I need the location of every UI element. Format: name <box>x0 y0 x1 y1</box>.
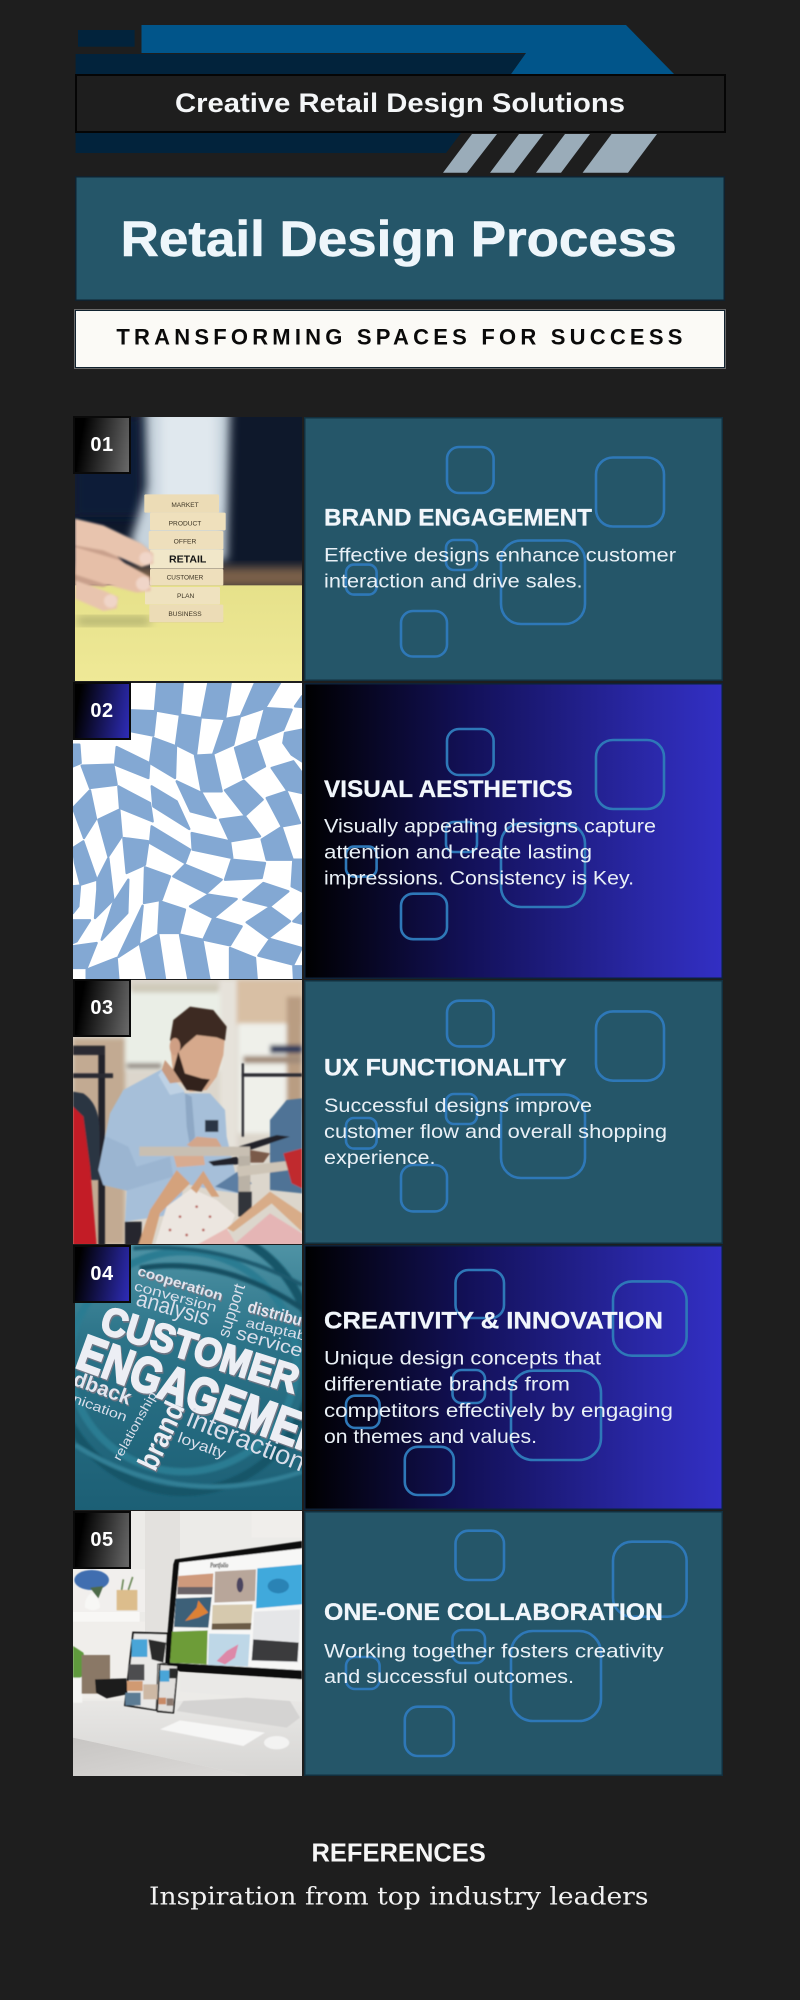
step 4 heading: CREATIVITY & INNOVATION <box>324 1308 663 1335</box>
step 3 number badge <box>73 979 131 1037</box>
references heading: REFERENCES <box>312 1840 486 1868</box>
step 1 description: interaction and drive sales. <box>324 570 582 592</box>
step 3 description <box>324 1095 667 1169</box>
step 4 description <box>324 1348 673 1448</box>
step 4 description: competitors effectively by engaging <box>324 1400 673 1422</box>
step 3 photo: store associate with tablet <box>73 980 302 1244</box>
step 2 description <box>324 816 656 890</box>
step 4 description: on themes and values. <box>324 1426 537 1448</box>
step 5 photo: desktop and tablet on desk <box>73 1511 302 1776</box>
step 4 photo: customer engagement word cloud <box>75 1245 688 1754</box>
header ribbon graphic <box>76 25 674 173</box>
step 2 description: attention and create lasting <box>324 842 592 864</box>
step 2 number badge <box>73 682 131 740</box>
step 1 number badge: 01 <box>90 434 114 456</box>
step 5 description: Working together fosters creativity <box>324 1640 664 1662</box>
step 2 number badge: 02 <box>90 700 114 722</box>
decorative squares <box>346 1531 687 1756</box>
step 3 description: customer flow and overall shopping <box>324 1121 667 1143</box>
step 1 photo: wooden blocks <box>75 417 302 681</box>
subtitle banner: TRANSFORMING SPACES FOR SUCCESS <box>116 324 682 349</box>
tagline banner <box>75 74 726 133</box>
decorative squares <box>346 447 664 656</box>
decorative squares <box>346 729 664 939</box>
subtitle banner <box>75 310 725 368</box>
title panel: Retail Design Process <box>121 211 677 267</box>
step 4 description: differentiate brands from <box>324 1374 570 1396</box>
step 1 description <box>324 544 677 592</box>
step 4 photo: customer engagement word cloud: cooperation <box>136 1263 225 1304</box>
step 3 description: experience. <box>324 1147 436 1169</box>
step 4 photo: customer engagement word cloud: service <box>234 1322 302 1361</box>
step 1 photo: wooden blocks: MARKET <box>171 502 199 509</box>
step 4 description: Unique design concepts that <box>324 1348 602 1370</box>
step 3 heading: UX FUNCTIONALITY <box>324 1054 566 1081</box>
step 2 photo: warped checkerboard <box>73 683 302 979</box>
step 5 description <box>324 1640 664 1688</box>
decorative squares <box>346 1270 687 1495</box>
tagline banner: Creative Retail Design Solutions <box>175 88 625 118</box>
decorative squares <box>346 1001 664 1211</box>
step 5 photo: desktop and tablet on desk: Portfolio <box>210 1561 229 1570</box>
step 2 heading: VISUAL AESTHETICS <box>324 776 573 803</box>
step 4 number badge <box>73 1245 131 1303</box>
step 5 description: and successful outcomes. <box>324 1666 574 1688</box>
step 4 photo: customer engagement word cloud: loyalty <box>175 1429 229 1463</box>
step 2 panel <box>304 683 723 979</box>
step 1 photo: wooden blocks: PLAN <box>177 593 195 600</box>
step 4 photo: customer engagement word cloud: brand <box>131 1396 192 1475</box>
step 4 photo: customer engagement word cloud: analysis <box>134 1285 213 1330</box>
step 1 photo: wooden blocks: CUSTOMER <box>167 575 204 582</box>
step 1 description: Effective designs enhance customer <box>324 544 677 566</box>
step 5 number badge: 05 <box>90 1529 114 1551</box>
step 4 photo: customer engagement word cloud: conversion <box>133 1278 219 1315</box>
step 2 description: impressions. Consistency is Key. <box>324 868 634 890</box>
step 4 number badge: 04 <box>90 1263 114 1285</box>
references text: Inspiration from top industry leaders <box>149 1881 648 1910</box>
step 2 description: Visually appealing designs capture <box>324 816 656 838</box>
step 1 number badge <box>73 416 131 474</box>
step 4 photo: customer engagement word cloud: relationship <box>110 1389 160 1463</box>
step 3 description: Successful designs improve <box>324 1095 592 1117</box>
step 4 photo: customer engagement word cloud: support <box>214 1281 249 1340</box>
title panel <box>75 176 725 301</box>
step 1 panel <box>304 417 723 681</box>
step 3 panel <box>304 980 723 1244</box>
step 5 number badge <box>73 1511 131 1569</box>
step 3 number badge: 03 <box>90 997 114 1019</box>
references footer <box>149 1840 648 1910</box>
step 1 photo: wooden blocks: PRODUCT <box>169 520 201 527</box>
step 1 photo: wooden blocks: RETAIL <box>169 555 206 566</box>
step 5 heading: ONE-ONE COLLABORATION <box>324 1599 663 1626</box>
step 4 panel <box>304 1245 723 1510</box>
step 1 photo: wooden blocks: BUSINESS <box>168 611 202 618</box>
step 1 heading: BRAND ENGAGEMENT <box>324 504 592 532</box>
step 1 photo: wooden blocks: OFFER <box>174 539 197 546</box>
step 5 panel <box>304 1511 723 1776</box>
